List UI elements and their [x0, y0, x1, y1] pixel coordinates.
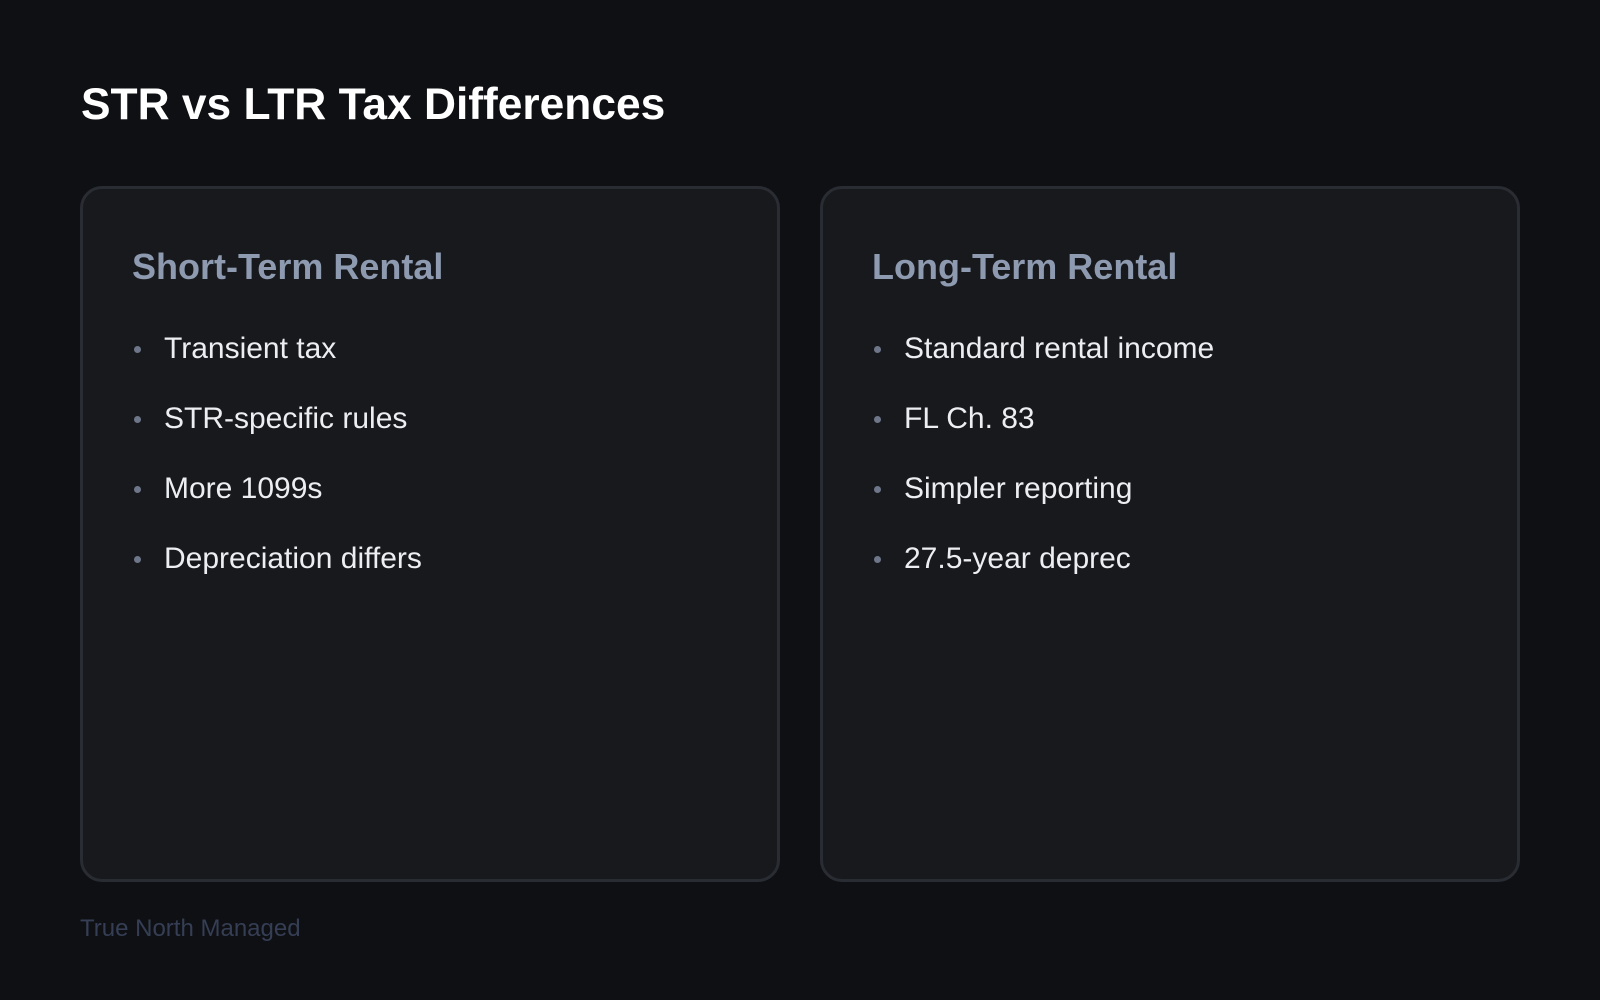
bullet: STR-specific rules: STR-specific rules: [164, 402, 407, 435]
bullet: FL Ch. 83: FL Ch. 83: [904, 402, 1035, 435]
bullet: simpler reporting: Simpler reporting: [904, 472, 1132, 505]
heading: long-term rental: Long-Term Rental: [872, 246, 1177, 287]
bullet: more 1099s: More 1099s: [164, 472, 322, 505]
panel: short-term rental: [80, 186, 780, 882]
bullet: depreciation differs: Depreciation differs: [164, 542, 422, 575]
title: STR vs LTR Tax Differences: [81, 80, 665, 129]
bullet: standard rental income: Standard rental income: [904, 332, 1214, 365]
footer: True North Managed: [80, 915, 301, 942]
bullet: 27.5-year deprec: 27.5-year deprec: [904, 542, 1131, 575]
panel: long-term rental: [820, 186, 1520, 882]
heading: short-term rental: Short-Term Rental: [132, 246, 443, 287]
bullet: transient tax: Transient tax: [164, 332, 336, 365]
